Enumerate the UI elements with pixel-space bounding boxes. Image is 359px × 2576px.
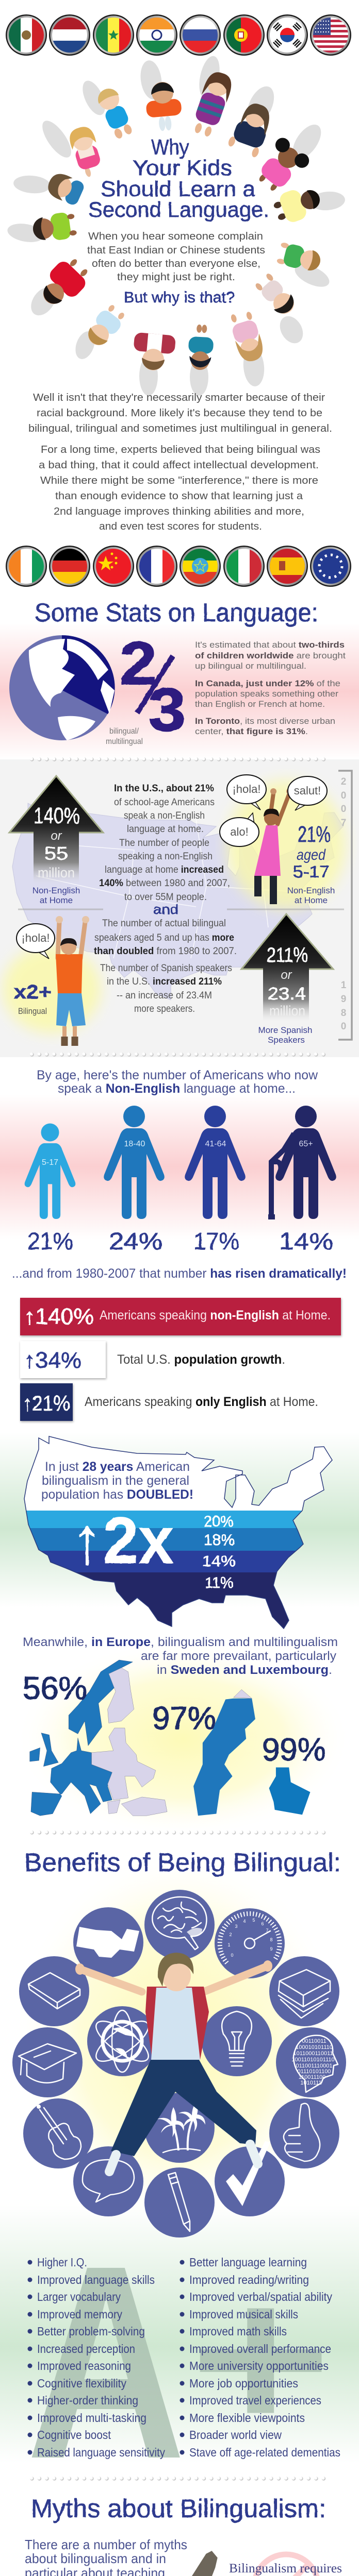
intro text: often do better than everyone else, xyxy=(92,258,260,269)
stat: Luxembourg 99 percent: 99% xyxy=(262,1732,326,1768)
bar: 140 percent xyxy=(20,1298,341,1335)
title: Should Learn a xyxy=(101,177,256,201)
arrow: 140 percent: 55 xyxy=(44,843,68,864)
child: floral dress xyxy=(253,272,299,319)
icon: speech bubble xyxy=(73,2146,143,2216)
heading: Some Stats on Language: Some Stats on Language: xyxy=(35,598,318,627)
icon: speedometer: 0 xyxy=(231,1953,234,1958)
center text: In the U.S., about 21% xyxy=(114,783,214,794)
speech bubble: hola boy: ¡hola! xyxy=(21,931,50,944)
arrow: 211 percent: More Spanish xyxy=(258,1025,312,1035)
center text: The number of actual bilingual xyxy=(102,918,226,929)
intro text: they might just be right. xyxy=(117,272,235,283)
arrow: 140 percent: 140% xyxy=(34,803,80,828)
list: benefits right column: Broader world view xyxy=(189,2428,282,2442)
icon: book xyxy=(19,1956,89,2026)
list: benefits left column: Larger vocabulary xyxy=(37,2290,121,2303)
speech bubble: hola boy xyxy=(17,924,55,959)
text: worldwide statistics: population speaks something other xyxy=(195,689,338,699)
icon: head with binary: 1011000110011 xyxy=(293,2050,333,2057)
icon: head with binary: 011001110001 xyxy=(296,2063,332,2069)
icon: violin xyxy=(23,2098,93,2168)
center text: than doubled from 1980 to 2007. xyxy=(94,946,237,957)
center text: to over 55M people. xyxy=(124,892,207,903)
band: white below panel xyxy=(0,1057,359,1095)
text: worldwide statistics: It's estimated that about two-thirds xyxy=(195,640,345,650)
list: benefits left column: Raised language sensitivity xyxy=(37,2446,165,2459)
stat: doubled bilingual: Bilingual xyxy=(18,1006,47,1016)
boy with arms spread xyxy=(75,1953,272,2172)
bar: 21 percent xyxy=(20,1383,318,1421)
heading: myths: Myths about Bilingualism: xyxy=(31,2494,326,2523)
icon: thumbs up xyxy=(269,2098,339,2168)
list: benefits right column: Improved math skills xyxy=(189,2325,287,2338)
stat: two times: ↑2x xyxy=(71,1504,174,1578)
center text: 140% between 1980 and 2007, xyxy=(99,878,230,889)
icon: speedometer xyxy=(215,1908,285,1978)
child: red shirt xyxy=(34,252,94,313)
icon: head with binary: 10011010101110 xyxy=(291,2057,335,2063)
flag: European Union xyxy=(310,546,351,587)
child: plaid shirt xyxy=(132,332,176,372)
child: teal dress xyxy=(187,324,215,370)
icon: pencil xyxy=(144,2167,215,2238)
band percentages: 11% xyxy=(205,1574,234,1591)
icon: book stack xyxy=(269,1956,339,2026)
timeline bracket: 7 xyxy=(341,818,346,828)
icon: graduation cap xyxy=(12,2027,83,2097)
icon: light bulb xyxy=(202,2006,272,2076)
flag row: top xyxy=(6,14,351,56)
list: benefits left column: Improved language skills xyxy=(37,2273,155,2286)
myth labels: Bilingualism requires xyxy=(229,2562,342,2575)
list: benefits left column: Higher-order thinking xyxy=(37,2394,138,2407)
children circle photo xyxy=(6,54,346,396)
list: benefits left column xyxy=(28,2256,165,2459)
yellow glow behind boy xyxy=(3,945,101,1033)
stat: 21 percent aged 5-17: at Home xyxy=(295,895,328,905)
title: Why xyxy=(151,135,189,159)
panel: US growth xyxy=(3,771,352,1046)
flag: Ivory Coast xyxy=(6,546,47,587)
watermark: A plus xyxy=(26,2208,331,2516)
speech bubble: alo: alo! xyxy=(230,825,249,838)
bar: 140 percent: ↑140% xyxy=(24,1304,94,1329)
person: 65+ with cane xyxy=(268,1106,336,1219)
text: worldwide statistics: In Canada, just under 12% of the xyxy=(195,679,340,688)
intro text: that East Indian or Chinese students xyxy=(87,245,265,256)
text: Europe: are far more prevailant, particularly xyxy=(141,1649,336,1663)
stat: two thirds xyxy=(120,630,186,744)
hammer head xyxy=(153,2551,218,2576)
watermark: A plus: + xyxy=(190,2243,331,2473)
flag: France xyxy=(136,546,177,587)
child: green shirt xyxy=(276,242,323,274)
bar: 34 percent: Total U.S. population growth. xyxy=(117,1352,285,1367)
map: US bilingualism bands xyxy=(24,1436,333,1629)
flag: India xyxy=(136,14,177,56)
bead divider xyxy=(31,1832,330,1833)
icon: handshake xyxy=(73,1907,143,1977)
icon: head with binary: 100010101110 xyxy=(296,2044,333,2050)
center text: more speakers. xyxy=(134,1004,195,1014)
icon: speedometer: 3 xyxy=(235,1924,238,1929)
stat: 21 percent aged 5-17 xyxy=(287,822,335,905)
center text: -- an increase of 23.4M xyxy=(117,990,212,1001)
stat: 21 percent aged 5-17: aged xyxy=(297,846,326,863)
stat: 21 percent aged 5-17: Non-English xyxy=(287,886,335,895)
heading: by age xyxy=(37,1068,318,1096)
list: benefits left column: Improved reasoning xyxy=(37,2359,131,2372)
arrow: 140 percent: Non-English xyxy=(32,886,80,895)
list: benefits left column: Improved memory xyxy=(37,2308,122,2321)
title: Second Language. xyxy=(88,197,269,222)
continent: North America xyxy=(29,639,75,707)
child: navy dress xyxy=(226,99,275,159)
multilingual countries xyxy=(30,1660,133,1816)
explanatory paragraphs: Well it isn't that they're necessarily smarter because of their xyxy=(33,392,325,403)
list: benefits right column: More university opportunities xyxy=(189,2359,329,2372)
caption: bilingual/multilingual: bilingual/ xyxy=(109,727,139,736)
text: myths intro xyxy=(25,2537,187,2576)
hammer and hand xyxy=(153,2551,359,2576)
person: 65+ with cane: 65+ xyxy=(299,1140,313,1148)
intro text: When you hear someone complain xyxy=(88,231,263,242)
explanatory paragraphs: a bad thing, that it could affect intellectual development. xyxy=(39,460,319,471)
icon: head with binary xyxy=(276,2027,346,2097)
explanatory paragraphs: While there might be some "interference," there is more xyxy=(40,475,318,486)
boy jumping xyxy=(56,916,89,1046)
feet xyxy=(109,2144,258,2172)
other countries xyxy=(92,1668,167,1816)
text: Europe: Meanwhile, in Europe, bilingualism and multilingualism xyxy=(23,1635,338,1649)
continent: South America xyxy=(58,716,95,740)
child: pink dress xyxy=(250,135,312,198)
flag: USA xyxy=(310,14,351,56)
list: benefits left column: Higher I.Q. xyxy=(37,2256,87,2269)
child: blue necklace xyxy=(44,170,86,207)
title xyxy=(88,135,269,222)
text: worldwide statistics xyxy=(195,640,346,736)
flag: China xyxy=(93,546,134,587)
map: Sweden xyxy=(193,1689,255,1816)
explanatory paragraphs: and even test scores for students. xyxy=(99,521,262,532)
icon: check mark xyxy=(215,2141,285,2216)
flag: Portugal xyxy=(223,14,265,56)
arrow: 140 percent: million xyxy=(38,865,75,880)
list: benefits right column: More job opportunities xyxy=(189,2377,298,2390)
timeline bracket: 2 xyxy=(341,776,346,787)
speech bubble: salut: salut! xyxy=(294,784,321,797)
stat: 21 percent aged 5-17: 21% xyxy=(298,822,331,847)
speech bubble: salut xyxy=(288,776,327,810)
flag row: middle xyxy=(6,546,351,587)
girl jumping xyxy=(254,788,292,904)
text: bilingualism doubled: bilingualism in the general xyxy=(42,1473,189,1488)
child: purple striped shirt xyxy=(189,69,235,139)
bar: 34 percent: ↑34% xyxy=(24,1348,81,1373)
arrow: 140 percent xyxy=(9,776,103,905)
bead divider xyxy=(31,2478,330,2479)
bead divider xyxy=(31,1054,330,1055)
icon: brain xyxy=(144,1890,215,1960)
chart: people by age xyxy=(25,1106,336,1219)
center text: speakers aged 5 and up has more xyxy=(94,933,234,943)
caption: bilingual/multilingual: multilingual xyxy=(106,737,143,746)
explanatory paragraphs: 2nd language improves thinking abilities and more, xyxy=(54,506,304,517)
explanatory paragraphs: than enough evidence to show that learning just a xyxy=(55,490,303,502)
child: yellow dress xyxy=(271,182,324,227)
child: blonde pink dress xyxy=(67,124,105,179)
bar: 34 percent xyxy=(20,1341,285,1378)
center text: language at home. xyxy=(127,824,204,835)
watermark: A plus: A xyxy=(26,2208,186,2516)
center text: The number of Spanish speakers xyxy=(100,963,232,974)
text: bilingualism doubled: population has DOUBLED! xyxy=(41,1487,193,1502)
title: Your Kids xyxy=(133,156,232,180)
subheading: risen dramatically: ...and from 1980-2007 that number has risen dramatically! xyxy=(12,1266,347,1281)
flag: Mexico xyxy=(6,14,47,56)
percentages by age: 21% xyxy=(27,1228,73,1255)
flag: Netherlands xyxy=(49,14,90,56)
timeline bracket: 8 xyxy=(341,1008,346,1019)
list: benefits left column: Cognitive boost xyxy=(37,2428,111,2442)
child: lime shirt xyxy=(31,211,77,244)
globe showing two thirds xyxy=(9,635,115,740)
stat: two thirds: 3 xyxy=(149,676,186,744)
icon: palm trees xyxy=(144,2093,215,2163)
stat: 21 percent aged 5-17: 5-17 xyxy=(293,862,330,881)
list: benefits left column: Improved multi-tasking xyxy=(37,2411,146,2425)
arrow: 211 percent: 23.4 xyxy=(268,984,306,1004)
percentages by age: 14% xyxy=(279,1228,333,1255)
list: benefits right column xyxy=(180,2256,340,2459)
timeline bracket: 9 xyxy=(341,994,346,1005)
icon: speedometer: 4 xyxy=(243,1919,246,1924)
text: worldwide statistics: of children worldwide are brought xyxy=(195,651,346,660)
icon: speedometer: 6 xyxy=(261,1921,264,1926)
icon: speedometer: 8 xyxy=(270,1937,273,1942)
arrow: 211 percent: or xyxy=(281,968,292,982)
arrow: 211 percent: 211% xyxy=(267,944,308,967)
child: pink top blonde xyxy=(227,309,266,364)
arrow: 140 percent: at Home xyxy=(40,895,73,905)
band percentages: 14% xyxy=(202,1553,236,1570)
explanatory paragraphs: For a long time, experts believed that being bilingual was xyxy=(41,444,320,455)
icon: head with binary: 00110011 xyxy=(302,2038,327,2044)
child: blue shirt xyxy=(94,85,135,141)
arrow: 211 percent: million xyxy=(269,1003,305,1019)
no-signs outside bubble xyxy=(17,2554,336,2576)
text: Europe xyxy=(23,1635,338,1677)
child: light blue shirt xyxy=(83,302,128,351)
speech bubble: hola xyxy=(227,775,266,810)
person: 18-40 xyxy=(104,1106,165,1219)
flag: Italy xyxy=(223,546,265,587)
timeline bracket: 0 xyxy=(341,790,346,801)
icon: head with binary: 01110101100 xyxy=(298,2069,331,2075)
icon: speedometer: 2 xyxy=(229,1932,232,1937)
list: benefits right column: Better language learning xyxy=(189,2256,307,2269)
flag: Spain xyxy=(267,546,308,587)
stat: doubled bilingual xyxy=(14,981,52,1016)
stat: two thirds: 2 xyxy=(120,630,157,698)
divider xyxy=(18,909,344,910)
center text: in the U.S. increased 211% xyxy=(107,976,222,987)
list: benefits right column: Improved reading/writing xyxy=(189,2273,309,2286)
shirt and vest xyxy=(145,1987,209,2060)
text: myths intro: about bilingualism and in xyxy=(25,2551,166,2566)
person: 5-17: 5-17 xyxy=(42,1158,58,1167)
center text: and xyxy=(153,902,178,917)
list: benefits right column: Improved overall performance xyxy=(189,2342,331,2355)
list: benefits left column: Cognitive flexibility xyxy=(37,2377,126,2390)
list: benefits right column: Improved verbal/spatial ability xyxy=(189,2290,332,2303)
stat: Europe 56 percent: 56% xyxy=(23,1671,87,1706)
arrow: 140 percent: or xyxy=(51,829,62,843)
icon: head with binary: 1010111 xyxy=(300,2080,322,2086)
heading: benefits: Benefits of Being Bilingual: xyxy=(24,1848,341,1877)
text: bilingualism doubled xyxy=(41,1460,193,1502)
map: Luxembourg xyxy=(269,1768,310,1815)
list: benefits left column: Better problem-solving xyxy=(37,2325,145,2338)
intro text xyxy=(87,231,265,283)
flag: Russia xyxy=(180,14,221,56)
continent: Greenland and Atlantic xyxy=(67,639,115,714)
explanatory paragraphs xyxy=(28,392,332,532)
text: worldwide statistics: center, that figure is 31% . xyxy=(195,726,308,736)
shadows of the children xyxy=(6,54,346,396)
benefits icon circles xyxy=(12,1890,346,2238)
bar: 140 percent: Americans speaking non-English at Home. xyxy=(100,1308,331,1323)
icon: speedometer: 9 xyxy=(270,1946,273,1952)
center text xyxy=(94,783,237,1014)
center text: speaking a non-English xyxy=(118,851,213,862)
list: benefits right column: More flexible viewpoints xyxy=(189,2411,305,2425)
percentages by age: 17% xyxy=(193,1228,239,1255)
heading: by age: speak a Non-English language at home... xyxy=(58,1081,296,1096)
explanatory paragraphs: bilingual, trilingual and sometimes just multilingual in general. xyxy=(28,423,332,434)
list: benefits left column: Increased perception xyxy=(37,2342,135,2355)
speech bubble: hola: ¡hola! xyxy=(232,783,261,795)
flag: Germany xyxy=(49,546,90,587)
timeline bracket: 1 xyxy=(341,980,347,991)
question heading: But why is that? xyxy=(124,289,235,306)
text: myths intro: There are a number of myths xyxy=(25,2537,187,2552)
center text: of school-age Americans xyxy=(114,797,215,808)
center text: The number of people xyxy=(119,838,209,849)
bar: 21 percent: Americans speaking only English at Home. xyxy=(85,1395,318,1409)
text: bilingualism doubled: In just 28 years American xyxy=(45,1460,190,1474)
map: Europe xyxy=(30,1660,167,1816)
bar: 21 percent: ↑21% xyxy=(23,1391,70,1415)
timeline bracket: 0 xyxy=(341,1021,346,1032)
background map of USA xyxy=(12,802,343,1002)
heading: by age: By age, here's the number of Americans who now xyxy=(37,1068,318,1082)
icon: atom globe xyxy=(87,2006,157,2076)
person: 5-17 xyxy=(25,1123,75,1219)
center text: speak a non-English xyxy=(124,810,205,821)
flag: Ethiopia xyxy=(180,546,221,587)
text: worldwide statistics: In Toronto , its most diverse urban xyxy=(195,716,335,726)
child: orange shirt xyxy=(144,80,183,132)
stat: Sweden 97 percent: 97% xyxy=(152,1701,216,1736)
flag: Senegal xyxy=(93,14,134,56)
list: benefits right column: Improved musical skills xyxy=(189,2308,298,2321)
icon: speedometer: 1 xyxy=(227,1942,231,1947)
yellow glow behind girl xyxy=(227,781,346,909)
explanatory paragraphs: racial background. More likely it's because they tend to be xyxy=(37,408,322,419)
stat: doubled bilingual: x2+ xyxy=(14,981,52,1003)
band percentages: 18% xyxy=(204,1532,235,1549)
person: 18-40: 18-40 xyxy=(124,1140,145,1148)
band percentages xyxy=(202,1513,236,1591)
text: worldwide statistics: than English or French at home. xyxy=(195,699,325,709)
arrow: 211 percent: Speakers xyxy=(268,1035,305,1045)
icon: speedometer: 7 xyxy=(266,1928,269,1933)
percentages by age: 24% xyxy=(109,1228,162,1255)
timeline bracket: 0 xyxy=(341,804,346,815)
text: worldwide statistics: up bilingual or multilingual. xyxy=(195,661,306,671)
flag: South Korea xyxy=(267,14,308,56)
center text: language at home increased xyxy=(105,865,224,875)
icon: head with binary: 110011100 xyxy=(299,2074,325,2080)
speech bubble: alo xyxy=(220,813,259,846)
band percentages: 20% xyxy=(204,1513,234,1530)
caption: bilingual/multilingual xyxy=(106,727,143,746)
head xyxy=(162,1960,191,1991)
list: benefits right column: Improved travel experiences xyxy=(189,2394,321,2407)
person: 41-64: 41-64 xyxy=(205,1140,226,1148)
jeans xyxy=(111,2060,256,2156)
icon: speedometer: 5 xyxy=(252,1918,255,1923)
arrow: 211 percent xyxy=(241,914,333,1045)
timeline bracket xyxy=(338,771,352,1040)
list: benefits right column: Stave off age-related dementias xyxy=(189,2446,340,2459)
text: Europe: in Sweden and Luxembourg . xyxy=(157,1663,332,1677)
person: 41-64 xyxy=(185,1106,246,1219)
percentages by age xyxy=(27,1228,333,1255)
